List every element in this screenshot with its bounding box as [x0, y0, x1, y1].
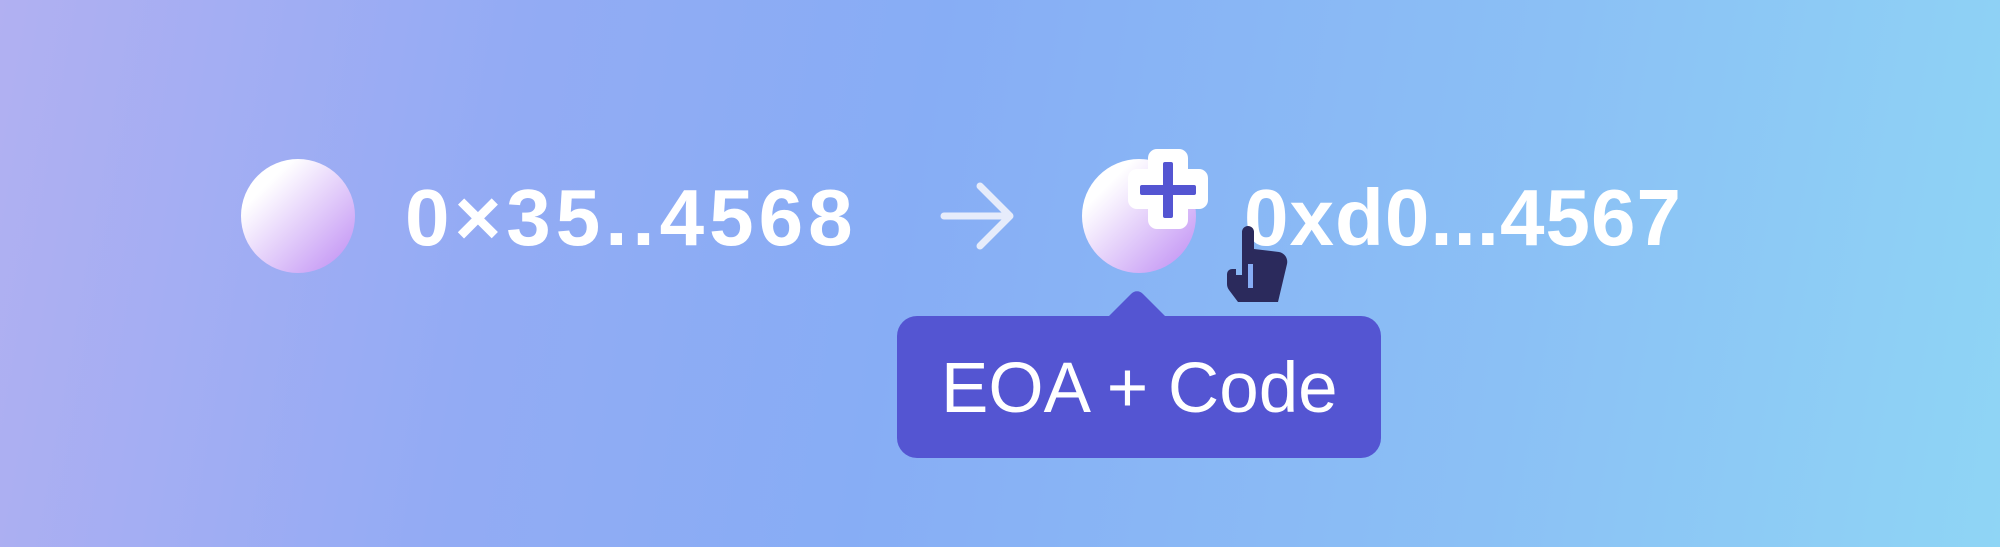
- avatar: delegated account: [1082, 159, 1196, 273]
- icon: plus badge: [1128, 149, 1208, 229]
- icon: hand cursor: [1227, 226, 1287, 302]
- avatar: source account: [241, 159, 355, 273]
- tooltip label: EOA + Code: [941, 349, 1338, 428]
- source address: 0×35..4568: [405, 173, 858, 262]
- tooltip: [897, 291, 1381, 458]
- arrow: [944, 186, 1010, 246]
- destination address: 0xd0...4567: [1244, 173, 1682, 262]
